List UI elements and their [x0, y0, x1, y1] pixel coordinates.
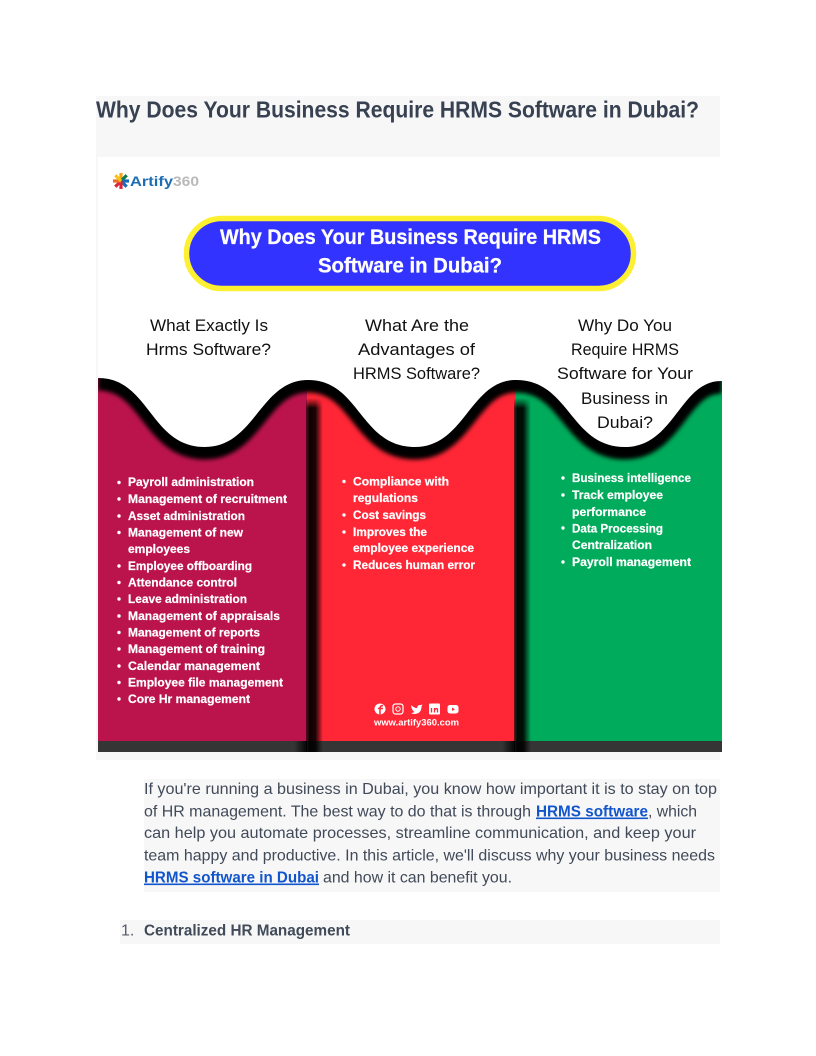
list: HRMS modules: Management of appraisals [128, 611, 280, 623]
list: advantages: Reduces human error [353, 560, 476, 572]
list: advantages: Improves the [353, 527, 427, 539]
title pill: Software in Dubai? [318, 254, 502, 278]
heading: why require: Business in [581, 389, 668, 408]
intro paragraph [144, 779, 720, 892]
panel divider shadows [306, 398, 531, 741]
heading: advantages [353, 316, 480, 383]
logo: Artify360: Artify [130, 173, 173, 189]
intro paragraph: If you're running a business in Dubai, you know how important it is to stay on top [144, 781, 717, 798]
icon: facebook [374, 704, 386, 714]
heading: what exactly: Hrms Software? [146, 340, 271, 359]
list: HRMS modules: Attendance control [128, 578, 237, 590]
logo: Artify360: 360 [173, 173, 199, 189]
list: HRMS modules: employees [128, 544, 190, 556]
heading: advantages: HRMS Software? [353, 364, 480, 383]
social icons [374, 704, 458, 714]
logo: Artify360 [113, 173, 199, 189]
list: reasons: Data Processing [572, 524, 663, 536]
intro paragraph: and how it can benefit you. [323, 870, 512, 886]
list: HRMS modules: Core Hr management [128, 694, 250, 706]
list: reasons: Track employee [572, 490, 663, 502]
heading: why require: Require HRMS [571, 340, 679, 359]
heading: what exactly: What Exactly Is [150, 316, 268, 335]
link: HRMS software in Dubai: HRMS software in Dubai [144, 870, 319, 886]
list: reasons [561, 473, 691, 569]
panel: what exactly is HRMS [98, 370, 307, 741]
heading: why require: Why Do You [578, 316, 672, 335]
page title: Why Does Your Business Require HRMS Software in Dubai? [96, 96, 699, 122]
list: HRMS modules: Management of new [128, 528, 243, 540]
panel: why require [515, 370, 722, 741]
list: HRMS modules: Payroll administration [128, 477, 254, 489]
list: advantages: Compliance with [353, 476, 449, 488]
title pill [186, 218, 634, 288]
list: HRMS modules: Employee offboarding [128, 561, 252, 573]
list item 1: Centralized HR Management [144, 922, 351, 940]
list: reasons: Business intelligence [572, 473, 691, 485]
wave white top [98, 360, 722, 447]
list: HRMS modules: Asset administration [128, 511, 245, 523]
list: reasons: Centralization [572, 540, 652, 552]
list: reasons: Payroll management [572, 557, 691, 569]
list item 1: 1. [121, 922, 134, 940]
list: reasons: performance [572, 507, 646, 519]
list item 1 [120, 920, 720, 944]
intro paragraph: can help you automate processes, streamline communication, and keep your [144, 825, 697, 842]
list: advantages: Cost savings [353, 510, 426, 522]
list: HRMS modules [117, 477, 287, 706]
wave shadow [98, 381, 722, 450]
list: HRMS modules: Management of training [128, 644, 265, 656]
heading: why require [557, 316, 693, 432]
heading: advantages: Advantages of [358, 340, 475, 359]
icon: logo sunburst [113, 173, 129, 189]
list: HRMS modules: Leave administration [128, 594, 247, 606]
intro paragraph: team happy and productive. In this article, we'll discuss why your business needs [144, 848, 715, 864]
heading: why require: Software for Your [557, 364, 693, 383]
heading: what exactly [146, 316, 271, 359]
heading: advantages: What Are the [365, 316, 469, 335]
list: advantages: regulations [353, 493, 418, 505]
heading: why require: Dubai? [597, 413, 653, 432]
list: HRMS modules: Calendar management [128, 661, 260, 673]
icon: instagram [393, 704, 403, 714]
intro paragraph: , which [648, 804, 697, 820]
icon: youtube [448, 705, 458, 714]
list: HRMS modules: Management of reports [128, 628, 260, 640]
title pill: Why Does Your Business Require HRMS [220, 226, 601, 249]
panel: advantages [307, 370, 515, 741]
website url: www.artify360.com [373, 718, 459, 728]
bottom bar [98, 741, 722, 752]
list: advantages [342, 476, 476, 572]
infographic [98, 157, 722, 752]
icon: twitter [411, 704, 422, 714]
intro paragraph: of HR management. The best way to do that is through [144, 804, 531, 820]
list: advantages: employee experience [353, 543, 474, 555]
icon: linkedin [429, 704, 440, 714]
link: HRMS software: HRMS software [536, 804, 648, 820]
list: HRMS modules: Employee file management [128, 678, 283, 690]
list: HRMS modules: Management of recruitment [128, 494, 287, 506]
